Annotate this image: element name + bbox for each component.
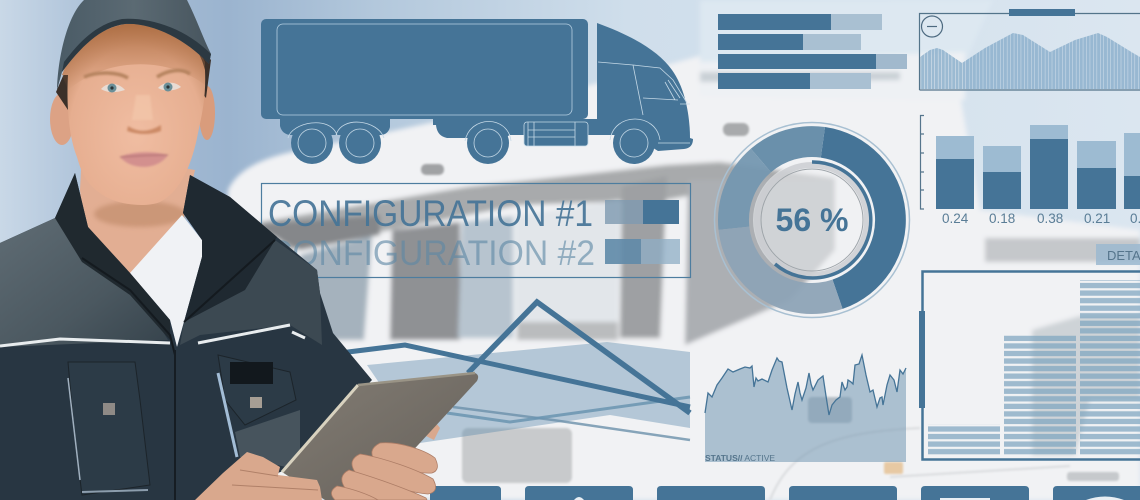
donut segments — [718, 126, 906, 314]
tablet — [282, 373, 478, 500]
bar labels: 0.24 — [942, 211, 969, 226]
left pocket — [68, 362, 150, 495]
progress arc — [775, 162, 871, 278]
reflective stripes — [0, 325, 305, 346]
tile icons — [574, 496, 1124, 500]
chart: horizontal bars — [718, 14, 907, 89]
value: 56 % — [776, 202, 848, 238]
rear axle fenders — [280, 119, 390, 135]
trailer — [261, 19, 588, 119]
status caption: STATUS// ACTIVE — [705, 453, 775, 463]
bottom tiles row — [430, 486, 1140, 500]
wheels — [288, 119, 660, 164]
neck — [80, 150, 195, 305]
icon: truck silhouette — [261, 19, 693, 164]
chart: status line graph — [705, 355, 906, 463]
neck shadow — [94, 201, 186, 227]
tractor cab — [433, 23, 693, 151]
text: configuration 1: CONFIGURATION #1 — [268, 193, 593, 234]
chart: top right area bars — [920, 9, 1140, 90]
bar labels: 0.38 — [1037, 211, 1063, 226]
chart: stacked bars — [920, 116, 1140, 226]
roof shadow band — [260, 162, 835, 250]
mini bar 2 — [605, 239, 680, 264]
text: configuration 2: CONFIGURATION #2 — [268, 234, 595, 273]
mini bar 1 — [605, 200, 679, 224]
chart: stepped rows — [919, 272, 1140, 460]
bar labels: 0.21 — [1084, 211, 1110, 226]
windscreen panes — [300, 236, 372, 340]
left hand — [195, 452, 322, 500]
chart: crossing line graph — [340, 302, 690, 443]
jacket — [0, 173, 372, 500]
icon: minus button — [922, 16, 942, 37]
cap — [57, 0, 211, 90]
bar labels: 0.18 — [989, 211, 1015, 226]
mouth — [120, 152, 168, 167]
frame tab — [919, 311, 925, 408]
t-shirt — [130, 215, 202, 347]
tag: detail: DETA — [1107, 248, 1140, 263]
nose — [127, 125, 161, 134]
right hand fingers — [331, 443, 437, 500]
bar labels — [942, 211, 1140, 226]
head — [50, 18, 215, 205]
right pocket — [218, 355, 300, 470]
eyes — [101, 82, 181, 92]
chart: donut 56 percent — [714, 122, 910, 318]
panel: configuration box — [262, 184, 690, 278]
person: driver with tablet — [0, 0, 478, 500]
eyebrows — [84, 70, 190, 78]
tag: detail — [1096, 244, 1140, 265]
fuel tank — [524, 122, 588, 146]
hand behind tablet — [426, 423, 440, 440]
tab — [1009, 9, 1075, 16]
